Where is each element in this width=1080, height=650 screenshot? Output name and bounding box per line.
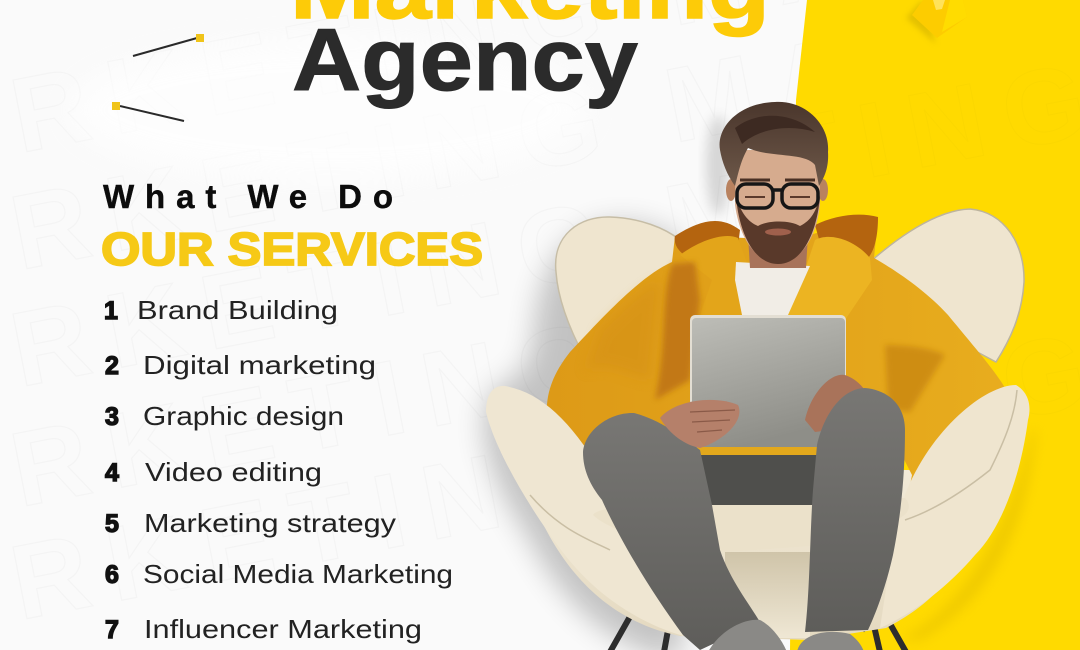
icon: yellow cube: [906, 0, 967, 44]
left hand: [660, 400, 739, 448]
decorative accent: lower line with square: [112, 102, 184, 121]
item 3: 3: [105, 403, 119, 431]
chair left arm: [486, 386, 700, 640]
tablet: [690, 315, 846, 448]
chair shadow on yellow: [900, 430, 1036, 640]
item 3: Graphic design: [143, 401, 344, 431]
left leg: [583, 413, 760, 650]
illustration: man on armchair with tablet: [484, 102, 1036, 650]
hoodie hood folds: [680, 236, 755, 320]
right sleeve shade: [885, 345, 945, 412]
item 6: 6: [105, 561, 119, 589]
services list: [104, 295, 453, 644]
neck and head: [720, 102, 828, 268]
item 6: Social Media Marketing: [143, 559, 453, 589]
item 2: 2: [105, 352, 119, 380]
item 5: Marketing strategy: [144, 508, 396, 538]
head shadow: [706, 115, 730, 215]
heading: What We Do: What We Do: [103, 178, 393, 215]
heading: OUR SERVICES: OUR SERVICES: [101, 223, 483, 275]
chair front panel: [725, 552, 810, 638]
right leg: [805, 388, 905, 632]
title: Agency: [292, 10, 638, 109]
chair back left lobe: [556, 217, 700, 358]
decorative accent: upper line with square: [133, 34, 204, 56]
t-shirt: [735, 262, 810, 315]
chair arm seam: [530, 390, 1017, 550]
right hand: [805, 375, 868, 432]
watermark: MARKETING pattern on yellow panel: [582, 0, 1080, 523]
item 4: [105, 457, 322, 487]
jeans lap: [690, 455, 820, 505]
title: [290, 0, 770, 109]
item 7: Influencer Marketing: [144, 614, 422, 644]
lips: [765, 228, 791, 236]
item 1: 1: [104, 297, 118, 325]
yellow panel: [790, 0, 1080, 650]
hoodie collar lining: [675, 215, 878, 270]
chair body: [530, 470, 995, 640]
item 7: 7: [105, 616, 119, 644]
hoodie hem: [697, 447, 825, 459]
eyebrows: [740, 178, 815, 182]
seat cushion: [593, 498, 909, 552]
left shoe: [708, 620, 787, 650]
item 1: Brand Building: [137, 295, 338, 325]
item 5: 5: [105, 510, 119, 538]
glasses: [737, 184, 818, 208]
chair right arm: [880, 385, 1030, 628]
item 2: Digital marketing: [143, 350, 376, 380]
hoodie: [547, 215, 1012, 505]
face: [735, 150, 820, 262]
right shoe: [797, 632, 864, 650]
neck: [748, 235, 808, 268]
left sleeve shade: [655, 262, 700, 400]
ears: [726, 179, 736, 201]
chair shadow: [484, 223, 700, 650]
chair legs: [610, 606, 906, 650]
item 4: Video editing: [145, 457, 322, 487]
chair back right lobe: [870, 209, 1024, 362]
item 4: 4: [105, 459, 119, 487]
white glow behind the text column: [70, 40, 590, 180]
hair: [720, 102, 828, 186]
beard: [736, 195, 820, 264]
